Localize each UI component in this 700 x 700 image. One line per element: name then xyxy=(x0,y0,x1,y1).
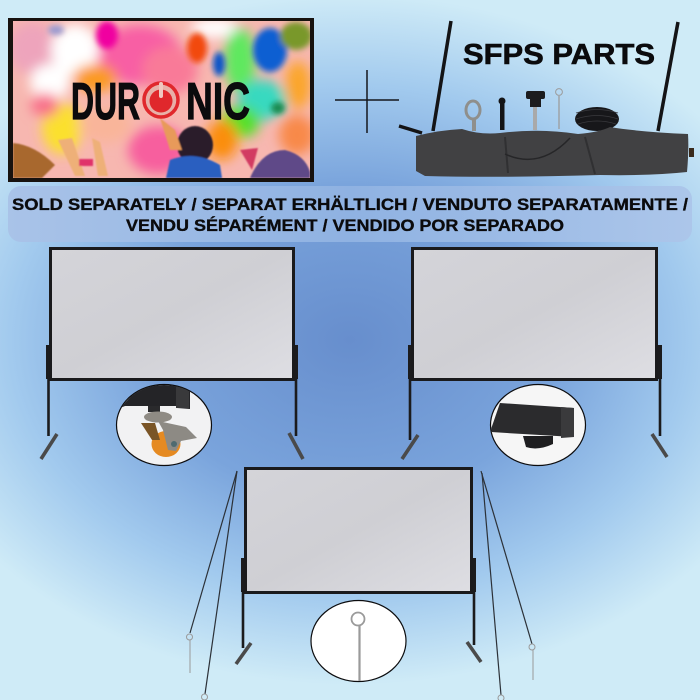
banner: sold separately xyxy=(8,186,692,242)
colourful powder image xyxy=(8,18,315,178)
carry bag xyxy=(416,127,694,177)
screen surface xyxy=(50,248,294,380)
panel: SFPS parts xyxy=(399,21,694,177)
banner: sold separately: SOLD SEPARATELY / SEPARAT ERHÄLTLICH / VENDUTO SEPARATAMENTE / xyxy=(12,195,688,214)
stand xyxy=(402,345,667,459)
panel: screen with feet xyxy=(402,248,667,459)
ground pegs xyxy=(186,634,535,700)
logo: Duronic: DUR xyxy=(71,73,140,131)
black bolt xyxy=(498,98,506,130)
screen surface xyxy=(246,468,472,592)
star knob with screw xyxy=(526,91,545,130)
panel: projector screen with Duronic logo xyxy=(8,18,315,182)
logo: Duronic: NIC xyxy=(186,73,250,131)
panel: screen with guy ropes and pegs xyxy=(186,468,535,700)
panel: screen with wheels xyxy=(41,248,303,459)
callout: ground peg xyxy=(311,600,406,682)
ground peg xyxy=(556,89,562,129)
callout: caster wheel xyxy=(116,384,212,466)
guy ropes xyxy=(190,471,532,695)
plus sign xyxy=(335,70,399,133)
heading: SFPS PARTS: SFPS PARTS xyxy=(463,39,655,71)
screen surface xyxy=(412,248,656,380)
logo: Duronic xyxy=(71,73,250,131)
power symbol xyxy=(144,82,178,117)
callout: rubber foot xyxy=(490,384,586,466)
poles xyxy=(399,21,678,133)
coiled guy rope xyxy=(575,107,619,131)
eye bolt xyxy=(466,101,480,131)
stand xyxy=(41,345,303,459)
stand xyxy=(236,558,481,664)
banner: sold separately: VENDU SÉPARÉMENT / VENDIDO POR SEPARADO xyxy=(126,216,564,235)
